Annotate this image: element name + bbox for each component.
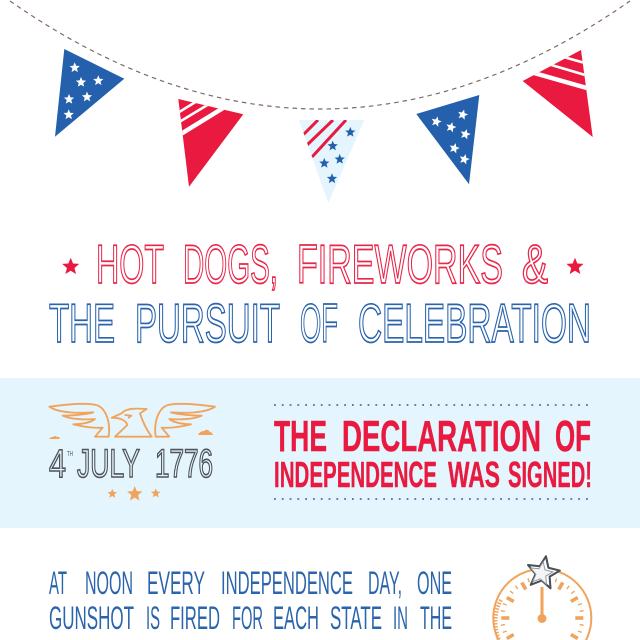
title line 1: DOGS, bbox=[183, 233, 278, 295]
heading line 2: INDEPENDENCE bbox=[274, 454, 437, 495]
title line 1 bbox=[96, 233, 548, 295]
title star right bbox=[566, 258, 584, 274]
noon gunshot text: IN bbox=[393, 600, 408, 636]
noon gunshot text bbox=[49, 565, 452, 636]
noon gunshot text: EVERY bbox=[147, 565, 205, 601]
dotted rule top bbox=[274, 404, 590, 406]
minor ticks bbox=[501, 577, 584, 632]
clock rim hatching bbox=[495, 600, 501, 640]
clock hand bbox=[540, 587, 544, 618]
flag 1: blue with stars bbox=[55, 49, 124, 137]
bunting garland bbox=[10, 1, 630, 203]
noon gunshot text: FOR bbox=[232, 600, 263, 636]
title line 1: & bbox=[522, 233, 548, 295]
ordinal suffix: TH bbox=[67, 451, 73, 458]
heading line 2: WAS bbox=[448, 454, 500, 495]
declaration heading bbox=[274, 405, 592, 499]
heading line 1: OF bbox=[555, 412, 591, 461]
major ticks bbox=[501, 582, 583, 638]
date emblem bbox=[49, 404, 215, 500]
flag 4: blue with stars bbox=[416, 95, 479, 184]
date text: 1776 bbox=[155, 442, 213, 486]
title bbox=[49, 233, 591, 354]
noon gunshot text: GUNSHOT bbox=[49, 600, 134, 636]
title line 1: HOT bbox=[96, 233, 164, 295]
noon gunshot text: FIRED bbox=[170, 600, 220, 636]
noon gunshot text: IS bbox=[146, 600, 160, 636]
date text: 4 bbox=[49, 442, 66, 486]
noon gunshot text: DAY, bbox=[368, 565, 402, 601]
date text: JULY bbox=[77, 442, 140, 486]
dotted rule bottom bbox=[274, 498, 590, 500]
heading line 1 bbox=[274, 412, 591, 461]
noon gunshot text: EACH bbox=[273, 600, 319, 636]
orange stars bbox=[108, 486, 160, 500]
noon gunshot text: INDEPENDENCE bbox=[221, 565, 353, 601]
star on top of clock bbox=[525, 553, 562, 589]
noon gunshot text: AT bbox=[49, 565, 67, 601]
icon: eagle bbox=[49, 404, 215, 437]
noon gunshot text: NOON bbox=[85, 565, 133, 601]
title star left bbox=[62, 258, 79, 274]
noon gunshot text: THE bbox=[420, 600, 452, 636]
icon: right cloud bbox=[198, 430, 213, 435]
icon: left cloud bbox=[49, 436, 60, 439]
title line 2: THE bbox=[49, 292, 115, 354]
noon gunshot text: ONE bbox=[417, 565, 452, 601]
title line 1: FIREWORKS bbox=[297, 233, 503, 295]
clock rim bbox=[493, 569, 591, 640]
panel: declaration band bbox=[0, 378, 640, 528]
title line 2 bbox=[49, 292, 591, 354]
garland string bbox=[10, 1, 630, 109]
clock pivot bbox=[538, 614, 546, 623]
icon: stopwatch clock bbox=[493, 553, 591, 640]
flag 3: pale blue with stripes and stars bbox=[299, 120, 364, 203]
flag 5: red with white stripes bbox=[523, 50, 594, 137]
date text bbox=[49, 442, 213, 486]
heading line 1: THE bbox=[274, 412, 327, 461]
title line 2: PURSUIT bbox=[135, 292, 280, 354]
noon gunshot text: STATE bbox=[330, 600, 382, 636]
title line 2: OF bbox=[300, 292, 338, 354]
flag 2: red with white stripes bbox=[176, 98, 243, 187]
